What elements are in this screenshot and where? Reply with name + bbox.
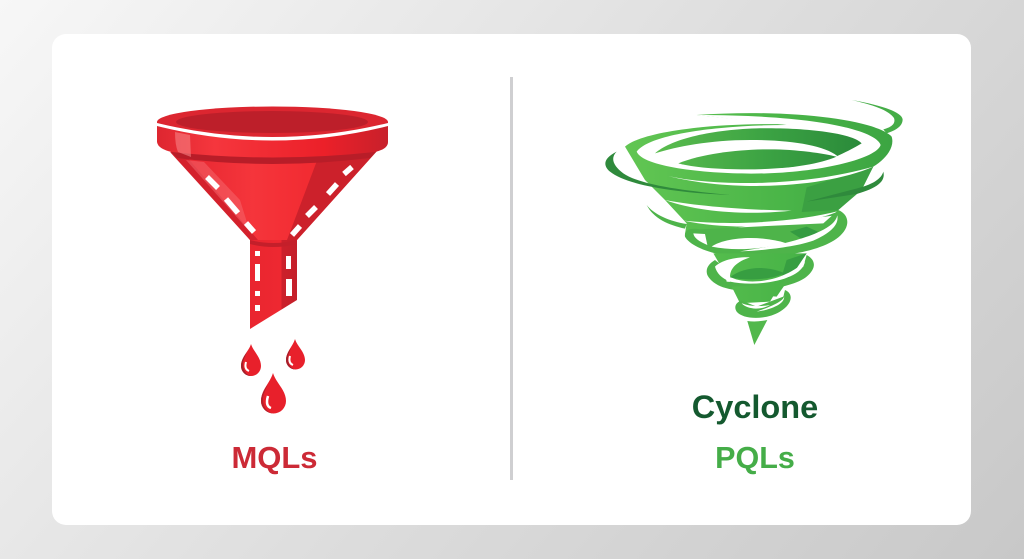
icon: red funnel xyxy=(157,106,388,329)
dark inner ellipse xyxy=(678,149,837,169)
white body streak xyxy=(668,167,873,186)
funnel stem xyxy=(250,240,297,329)
drop left xyxy=(241,344,261,376)
fourth ring xyxy=(707,255,814,291)
white lower streak xyxy=(683,211,840,227)
label: MQLs: MQLs xyxy=(231,440,318,475)
third ring right facet xyxy=(790,227,820,240)
funnel cone xyxy=(170,151,377,240)
dark left swoosh xyxy=(605,152,730,195)
divider xyxy=(510,77,513,480)
left lower swoosh xyxy=(647,205,687,229)
label: Cyclone: Cyclone xyxy=(692,389,818,425)
white tier gap xyxy=(665,200,792,213)
white inner ring xyxy=(637,115,881,174)
label: PQLs: PQLs xyxy=(715,441,795,475)
third ring xyxy=(685,210,847,257)
drop bottom xyxy=(261,373,286,414)
fourth tier cone xyxy=(713,253,807,297)
panel: comparison card xyxy=(52,34,971,525)
dark inner crescent xyxy=(655,128,862,156)
cyclone tip xyxy=(747,320,767,345)
fifth tier cone xyxy=(732,285,780,303)
inner green ellipse xyxy=(730,268,785,279)
icon: green cyclone xyxy=(605,100,903,345)
fifth ring xyxy=(735,290,791,318)
white third ring openings xyxy=(693,233,707,245)
fifth ring slivers xyxy=(742,303,770,309)
cyclone body xyxy=(625,113,892,234)
drop right xyxy=(286,339,305,370)
funnel rim xyxy=(157,122,388,158)
funnel seam dashes xyxy=(207,167,352,235)
fourth ring opening xyxy=(715,257,805,284)
right body facet xyxy=(802,167,873,212)
dark right swoosh xyxy=(807,172,884,202)
top right swoosh xyxy=(852,100,903,133)
icon: three red drops xyxy=(241,339,305,414)
